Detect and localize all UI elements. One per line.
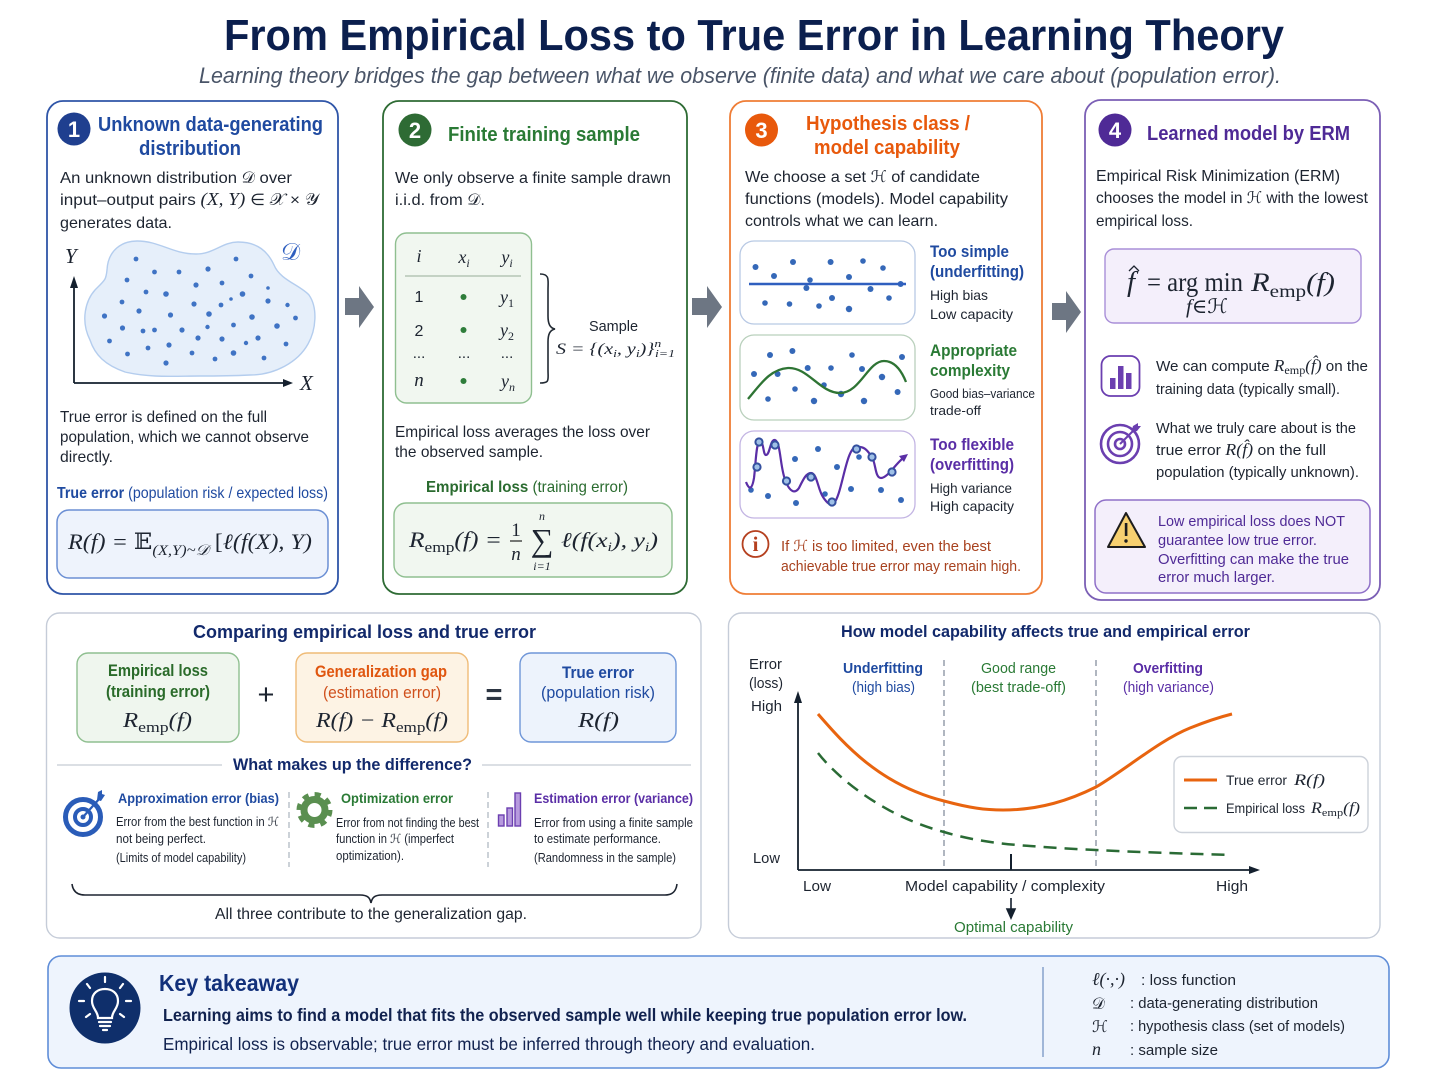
y axis labels: Error	[749, 656, 782, 673]
true error label: True error (population risk / expected loss)	[57, 485, 328, 502]
box: true error: (population risk)	[541, 684, 655, 702]
ERM formula: f∈ℋ	[1186, 294, 1228, 318]
computable empirical risk text: (f̂)	[1305, 355, 1322, 375]
empirical loss formula: (f) =	[454, 527, 502, 552]
sample table: i	[509, 256, 513, 270]
intro text 2: We only observe a finite sample drawn	[395, 170, 671, 187]
intro text 1: An unknown distribution 𝒟 over	[60, 168, 293, 187]
sample table: n	[509, 380, 515, 394]
estimation error: to estimate performance.	[534, 832, 661, 846]
panel 4: learned model by ERM	[1085, 100, 1380, 600]
notation legend: : sample size	[1130, 1042, 1218, 1059]
optimal capability arrow	[1007, 898, 1015, 918]
underfitting labels	[930, 243, 1024, 322]
step badge 1: 1	[68, 117, 80, 142]
appropriate complexity chart	[740, 335, 915, 420]
empirical loss formula: i=1	[533, 559, 551, 573]
ERM formula: R	[1251, 268, 1267, 297]
true error care text: population (typically unknown).	[1156, 464, 1359, 481]
true error explanation: True error is defined on the full	[60, 409, 267, 426]
underfitting labels: (underfitting)	[930, 263, 1024, 281]
empirical loss formula: 1	[511, 520, 521, 541]
sample brace	[540, 274, 555, 383]
capability warning note: achievable true error may remain high.	[781, 558, 1021, 575]
overfitting labels: High variance	[930, 480, 1012, 496]
icon: blue target	[66, 790, 105, 834]
appropriate complexity labels: Appropriate	[930, 342, 1017, 360]
empirical loss text: the observed sample.	[395, 444, 543, 461]
icon: info	[742, 531, 768, 557]
box: empirical loss: (f)	[169, 708, 192, 732]
overfitting labels	[930, 436, 1014, 514]
y axis labels	[749, 656, 783, 867]
intro text 3: controls what we can learn.	[745, 213, 938, 230]
sample table: 1	[508, 296, 514, 310]
chart legend: R(f)	[1293, 772, 1325, 789]
approximation error: (Limits of model capability)	[116, 851, 246, 865]
ERM formula: emp	[1270, 281, 1306, 301]
true error care text: What we truly care about is the	[1156, 420, 1356, 437]
panel: key takeaway	[48, 956, 1389, 1068]
estimation error: (Randomness in the sample)	[534, 851, 676, 865]
appropriate complexity labels: trade-off	[930, 404, 982, 418]
overfitting labels: High capacity	[930, 498, 1014, 514]
intro text 4: chooses the model in ℋ with the lowest	[1096, 188, 1369, 207]
computable empirical risk text: emp	[1284, 363, 1305, 377]
capability warning note	[781, 537, 1021, 575]
optimization error	[336, 790, 479, 863]
sample definition: i=1	[655, 348, 675, 360]
region labels: (best trade-off)	[971, 679, 1066, 696]
ERM formula: (f)	[1306, 268, 1335, 297]
notation legend: 𝒟	[1092, 994, 1105, 1013]
sample table: y	[501, 371, 509, 391]
overfitting chart	[740, 431, 915, 518]
optimization error: optimization).	[336, 849, 404, 863]
empirical loss formula: ∑	[531, 522, 553, 558]
sample definition: n	[654, 338, 662, 350]
true error formula: ℓ(f(X), Y)	[223, 529, 304, 554]
computable empirical risk text: training data (typically small).	[1156, 381, 1340, 398]
empirical loss formula: emp	[425, 540, 454, 556]
ERM formula: f	[1127, 266, 1139, 298]
sample table: y	[501, 247, 509, 267]
optimization error: function in ℋ (imperfect	[336, 831, 454, 846]
heading 2: Finite training sample	[448, 123, 640, 146]
panel 1: unknown data-generating distribution	[47, 101, 338, 594]
intro text 2: i.i.d. from 𝒟.	[395, 190, 485, 209]
estimation error: Estimation error (variance)	[534, 790, 693, 806]
heading 4: Learned model by ERM	[1147, 122, 1350, 145]
sample table: ...	[501, 345, 513, 362]
distribution diagram: X	[299, 371, 314, 395]
chart legend	[1174, 756, 1368, 832]
sample table: y	[500, 320, 508, 340]
sample definition: S = {(x	[556, 341, 602, 358]
empirical loss formula: n	[539, 509, 545, 523]
takeaway heading: Key takeaway	[159, 970, 299, 996]
empirical loss formula	[394, 503, 672, 577]
underfitting labels: Too simple	[930, 243, 1009, 261]
empirical loss formula: ℓ(f(x	[561, 528, 599, 552]
empirical loss label: Empirical loss (training error)	[426, 479, 628, 496]
box: generalization gap: (f)	[425, 708, 448, 732]
box: empirical loss: R	[123, 708, 136, 732]
box: generalization gap: R(f) − R	[316, 708, 386, 732]
intro text 4	[1096, 168, 1369, 230]
empirical loss formula: i	[645, 539, 650, 554]
ERM formula	[1105, 249, 1361, 323]
step badge 3	[745, 114, 778, 146]
sample table: ...	[458, 345, 470, 362]
box: true error	[520, 653, 676, 742]
intro text 1: input–output pairs (X, Y) ∈ 𝒳 × 𝒴	[60, 189, 321, 210]
sample table: 1	[415, 289, 424, 306]
notation legend: : data-generating distribution	[1130, 995, 1318, 1012]
true error formula: R(f) = 𝔼	[68, 529, 151, 554]
box: empirical loss: emp	[138, 720, 169, 736]
step badge 2: 2	[409, 118, 421, 143]
intro text 1	[60, 168, 321, 232]
warning callout	[1095, 500, 1370, 593]
notation legend: ℓ(·,·)	[1092, 969, 1125, 990]
icon: info: i	[753, 532, 759, 556]
step badge 4: 4	[1109, 118, 1122, 143]
empirical loss curve	[818, 753, 1232, 855]
true error explanation	[60, 409, 309, 466]
chart legend: R	[1311, 800, 1321, 817]
sample definition: )}	[638, 341, 655, 358]
chart legend: True error	[1226, 772, 1287, 788]
heading 1: distribution	[139, 137, 241, 160]
underfitting labels: Low capacity	[930, 306, 1013, 322]
step badge 4	[1098, 114, 1132, 146]
empirical loss formula: ), y	[611, 528, 646, 552]
subtitle: Learning theory bridges the gap between what we observe (finite data) and what we care about (population error).	[199, 63, 1281, 88]
sample table: n	[414, 370, 424, 391]
y axis labels: Low	[753, 850, 780, 867]
takeaway text: Learning aims to find a model that fits the observed sample well while keeping true population error low.	[163, 1005, 967, 1025]
empirical loss text: Empirical loss averages the loss over	[395, 424, 651, 441]
sample table: 2	[415, 323, 424, 340]
region labels: Underfitting	[843, 660, 923, 677]
warning text: guarantee low true error.	[1158, 532, 1317, 549]
notation legend: : loss function	[1141, 972, 1236, 989]
sample table: i	[466, 256, 470, 270]
box: empirical loss: Empirical loss	[108, 662, 208, 680]
optimal capability label: Optimal capability	[954, 919, 1073, 936]
distribution diagram	[65, 238, 315, 395]
sample table: i	[416, 246, 422, 266]
contribution note: All three contribute to the generalization gap.	[215, 906, 527, 923]
box: generalization gap: emp	[396, 720, 425, 736]
box: empirical loss: (training error)	[106, 683, 210, 701]
ERM formula: = arg min	[1147, 267, 1243, 297]
true error formula: [	[209, 529, 223, 554]
appropriate complexity labels	[930, 342, 1035, 418]
sample definition: Sample	[589, 318, 638, 335]
icon: bar chart	[1102, 356, 1140, 396]
empirical loss formula: )	[648, 528, 658, 552]
arrow 2 to 3	[692, 286, 722, 328]
optimization error: Optimization error	[341, 790, 453, 806]
overfitting labels: (overfitting)	[930, 456, 1014, 474]
y axis labels: High	[751, 698, 782, 715]
contribution brace	[72, 884, 677, 903]
approximation error: Error from the best function in ℋ	[116, 814, 279, 829]
icon: purple bars	[498, 793, 520, 826]
intro text 2	[395, 170, 671, 209]
computable empirical risk text: on the	[1326, 358, 1367, 375]
optimization error: Error from not finding the best	[336, 816, 479, 830]
box: true error: True error	[562, 664, 635, 682]
sample definition	[556, 318, 675, 360]
intro text 4: Empirical Risk Minimization (ERM)	[1096, 168, 1340, 185]
sample definition: i	[636, 348, 640, 360]
empirical loss formula: n	[511, 544, 521, 565]
computable empirical risk text	[1156, 355, 1368, 398]
difference heading: What makes up the difference?	[233, 755, 472, 774]
region labels: Overfitting	[1133, 660, 1203, 677]
chart legend: Empirical loss	[1226, 800, 1305, 816]
arrow 1 to 2	[345, 286, 374, 328]
heading 1	[98, 113, 323, 160]
icon: light bulb	[70, 972, 140, 1044]
distribution diagram: 𝒟	[281, 238, 301, 266]
step badge 1	[58, 112, 90, 146]
notation legend: n	[1092, 1039, 1101, 1059]
appropriate complexity labels: Good bias–variance	[930, 387, 1035, 401]
true error explanation: directly.	[60, 449, 113, 466]
approximation error: not being perfect.	[116, 832, 206, 846]
box: empirical loss	[77, 653, 239, 742]
chart axes	[794, 691, 1260, 874]
overfitting labels: Too flexible	[930, 436, 1014, 454]
step badge 2	[398, 114, 432, 146]
heading 1: Unknown data-generating	[98, 113, 323, 136]
arrow 3 to 4	[1052, 291, 1081, 333]
chart legend: (f)	[1343, 800, 1360, 817]
icon: target	[1101, 423, 1141, 463]
chart heading: How model capability affects true and empirical error	[841, 622, 1250, 641]
box: true error: R(f)	[577, 708, 619, 732]
warning text	[1158, 513, 1349, 586]
true error curve	[818, 714, 1232, 810]
intro text 3: functions (models). Model capability	[745, 191, 1008, 208]
notation legend: ℋ	[1092, 1017, 1108, 1036]
box: generalization gap	[296, 653, 468, 742]
true error formula: (X,Y)~𝒟	[152, 543, 212, 559]
empirical loss formula: R	[409, 527, 422, 552]
estimation error	[534, 790, 693, 865]
sample table: x	[458, 247, 466, 267]
region labels	[843, 660, 1214, 696]
chart legend: emp	[1322, 807, 1344, 819]
empirical loss text	[395, 424, 651, 461]
sample definition: i	[613, 348, 617, 360]
step badge 3: 3	[755, 118, 768, 143]
computable empirical risk text: We can compute R	[1156, 356, 1284, 375]
approximation error	[116, 790, 279, 865]
underfitting chart	[740, 241, 915, 324]
intro text 3: We choose a set ℋ of candidate	[745, 167, 980, 186]
comparison heading: Comparing empirical loss and true error	[193, 622, 536, 642]
takeaway text	[163, 1005, 967, 1054]
warning text: Low empirical loss does NOT	[1158, 513, 1345, 530]
sample definition: , y	[617, 341, 637, 358]
true error formula	[57, 510, 328, 578]
underfitting labels: High bias	[930, 287, 988, 303]
x axis labels: Model capability / complexity	[905, 878, 1106, 895]
intro text 1: generates data.	[60, 215, 172, 232]
icon: gear	[299, 794, 330, 826]
x axis labels	[803, 878, 1248, 895]
icon: warning triangle	[1108, 513, 1145, 547]
intro text 4: empirical loss.	[1096, 213, 1193, 230]
y axis labels: (loss)	[749, 675, 783, 692]
sample table: ...	[413, 345, 425, 362]
box: generalization gap: (estimation error)	[323, 684, 441, 702]
capability warning note: If ℋ is too limited, even the best	[781, 537, 992, 555]
notation legend: : hypothesis class (set of models)	[1130, 1018, 1345, 1035]
equals sign: =	[486, 679, 502, 711]
distribution diagram: Y	[65, 244, 79, 268]
panel 2: finite training sample	[383, 101, 687, 594]
sample table	[396, 233, 532, 403]
intro text 3	[745, 167, 1008, 230]
heading 3	[806, 112, 970, 159]
empirical loss formula: i	[608, 539, 612, 554]
region labels: (high bias)	[852, 679, 915, 696]
region labels: Good range	[981, 660, 1056, 677]
heading 3: Hypothesis class /	[806, 112, 970, 135]
panel: capability chart	[728, 613, 1380, 938]
true error explanation: population, which we cannot observe	[60, 429, 309, 446]
takeaway text: Empirical loss is observable; true error must be inferred through theory and evaluation.	[163, 1034, 815, 1054]
appropriate complexity labels: complexity	[930, 362, 1011, 380]
estimation error: Error from using a finite sample	[534, 816, 693, 830]
title: From Empirical Loss to True Error in Learning Theory	[224, 11, 1284, 60]
true error care text: true error R(f̂) on the full	[1156, 439, 1326, 459]
x axis labels: Low	[803, 878, 831, 895]
plus sign: +	[258, 679, 274, 711]
warning text: error much larger.	[1158, 569, 1275, 586]
sample table: y	[500, 287, 508, 307]
box: generalization gap: Generalization gap	[315, 663, 447, 681]
heading 3: model capability	[814, 136, 961, 159]
warning text: Overfitting can make the true	[1158, 551, 1349, 568]
notation legend	[1092, 969, 1345, 1059]
region labels: (high variance)	[1123, 679, 1214, 696]
true error care text	[1156, 420, 1359, 481]
x axis labels: High	[1216, 878, 1248, 895]
panel: comparing empirical loss and true error	[46, 613, 701, 938]
panel 3: hypothesis class / model capability	[730, 101, 1042, 594]
approximation error: Approximation error (bias)	[118, 790, 279, 806]
sample table: 2	[508, 329, 514, 343]
